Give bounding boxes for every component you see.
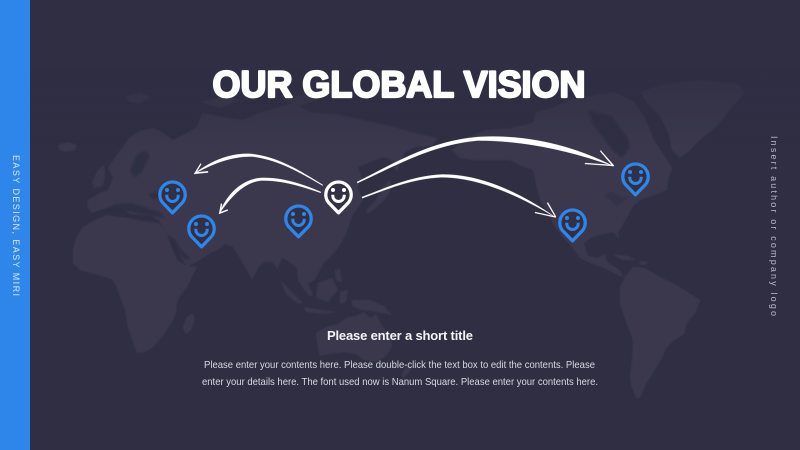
arrow: to Europe: [194, 154, 323, 186]
pin: origin white: [326, 182, 351, 213]
map: North America: [452, 92, 672, 278]
pin: Middle East: [189, 216, 214, 247]
map: Africa: [73, 215, 197, 353]
pin: China: [286, 206, 311, 237]
arrow: to North America west: [362, 174, 556, 218]
arrows: [194, 137, 614, 218]
pin: North America east: [623, 164, 648, 195]
map: Japan: [366, 180, 392, 214]
map: Australia: [316, 312, 392, 362]
arrow: to North America east: [357, 137, 614, 183]
map: Iceland: [58, 142, 77, 152]
author logo placeholder: Insert author or company logo: [769, 136, 779, 316]
map: South America: [620, 267, 700, 398]
body text: enter your details here. The font used now is Nanum Square. Please enter your contents here.: [202, 376, 598, 388]
body text: [202, 359, 598, 388]
map: northern fade: [30, 70, 800, 145]
title: OUR GLOBAL VISION: [212, 64, 586, 105]
pin: Europe: [160, 182, 185, 213]
map: Caribbean islands: [612, 254, 648, 265]
map: Southeast Asia islands: [280, 268, 392, 315]
map: Greenland: [640, 80, 745, 158]
map: Great Britain: [92, 165, 105, 188]
map: arctic islands: [125, 92, 320, 108]
map: Eurasia: [87, 103, 438, 297]
left sidebar: [0, 0, 30, 450]
map: New Zealand: [401, 362, 412, 378]
pin: North America west: [560, 210, 585, 241]
short title: Please enter a short title: [327, 328, 473, 343]
map: Sri Lanka: [249, 271, 253, 275]
map: seas and lakes: [103, 110, 630, 260]
map: Madagascar: [183, 313, 195, 334]
body text: Please enter your contents here. Please double-click the text box to edit the contents. Please: [204, 359, 595, 371]
world map: [58, 80, 745, 398]
arrow: to Middle East: [219, 178, 321, 214]
sidebar text: EASY DESIGN, EASY MIRI: [11, 155, 21, 296]
